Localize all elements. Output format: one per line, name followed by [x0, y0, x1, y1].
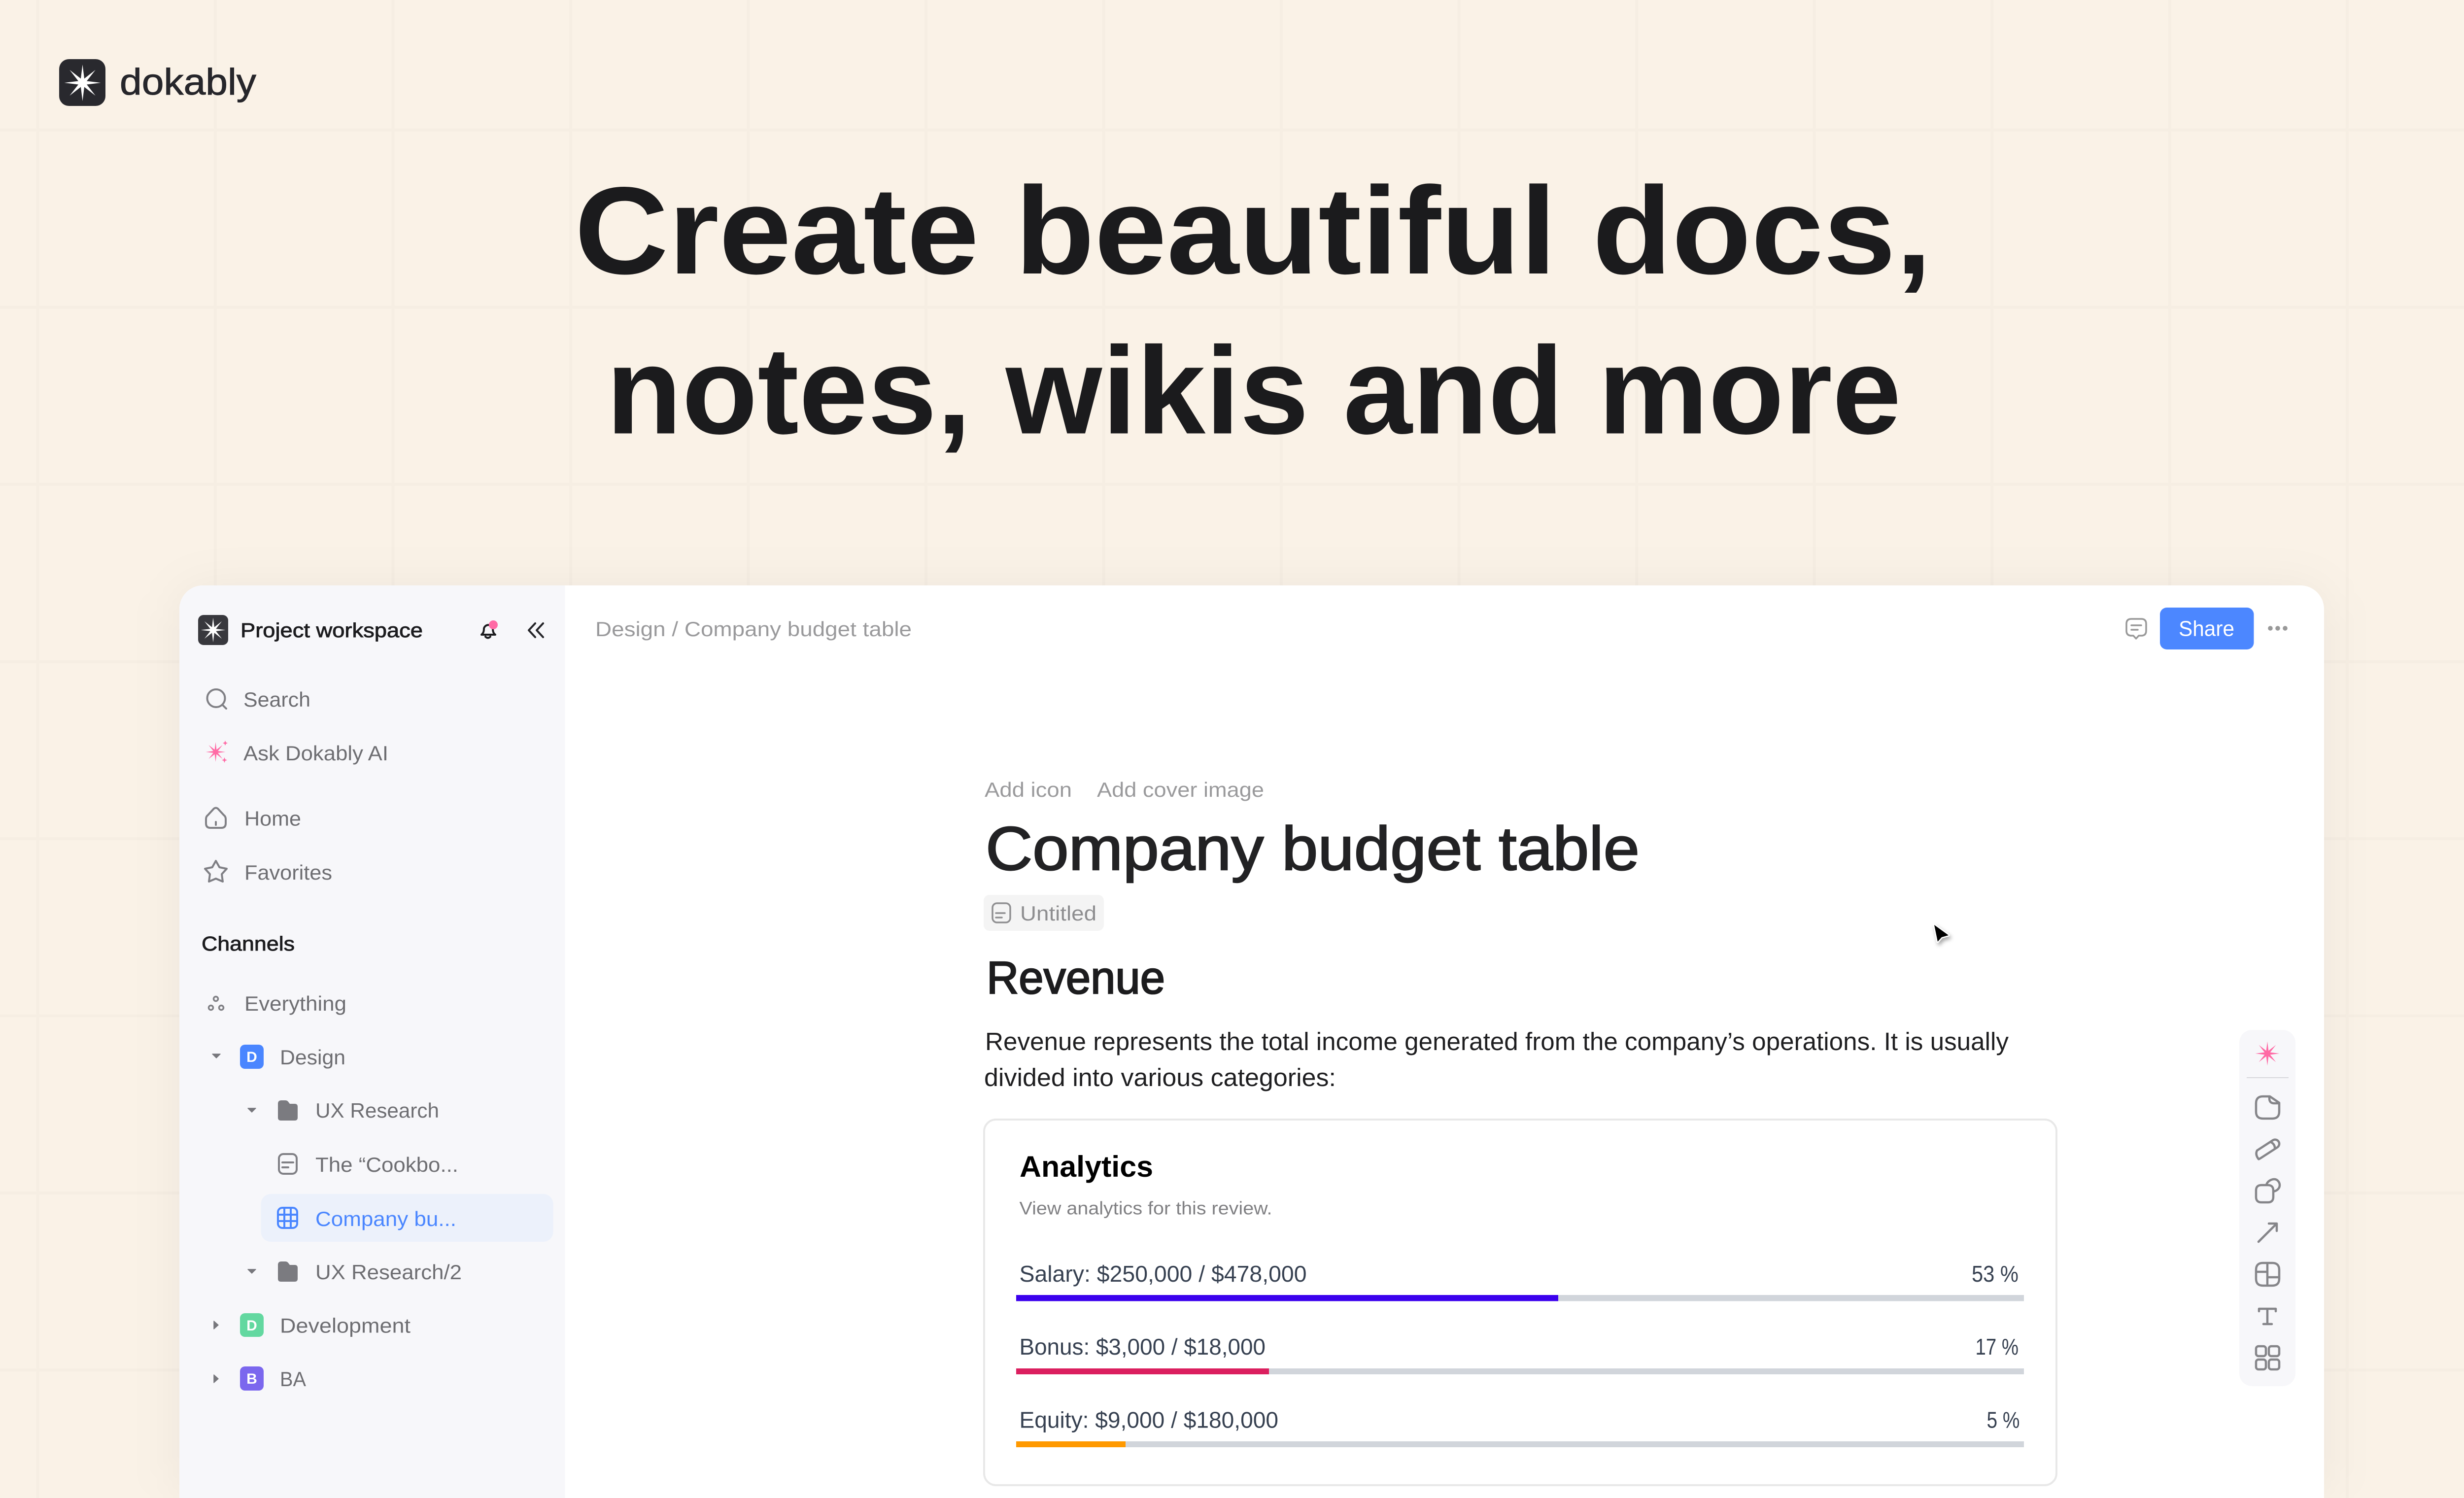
button: share: Share [2179, 617, 2234, 641]
workspace name: Project workspace [240, 619, 423, 642]
doc meta actions: Add icon [985, 778, 1072, 801]
selected doc: company budget: Company bu... [315, 1207, 456, 1230]
bar chart: bonus [1016, 1334, 2024, 1374]
analytics subtitle: View analytics for this review. [1019, 1198, 1272, 1218]
workspace header [198, 615, 543, 645]
doc meta actions: Add cover image [1097, 778, 1264, 801]
folder: UX research 2 [248, 1260, 462, 1284]
icon: text [2259, 1309, 2276, 1324]
nav: home: Home [244, 807, 301, 830]
icon: mouse cursor [1934, 925, 1949, 942]
icon: more menu [2268, 626, 2288, 631]
bar chart: salary [1016, 1261, 2024, 1301]
nav: search [207, 688, 310, 711]
nav: everything: Everything [244, 992, 346, 1015]
panel: app window [179, 585, 2324, 1498]
breadcrumb: Design / Company budget table [595, 617, 912, 641]
revenue paragraph [984, 1027, 2009, 1091]
icon: comment [2126, 619, 2146, 639]
title: headline: notes, wikis and more [606, 321, 1901, 460]
analytics heading: Analytics [1020, 1150, 1153, 1183]
card shadow [179, 589, 2324, 1498]
channel: development: Development [280, 1314, 411, 1337]
doc meta actions [985, 778, 1264, 801]
heading: revenue: Revenue [987, 952, 1165, 1003]
nav: search: Search [243, 688, 310, 711]
icon: sticky note [2256, 1096, 2279, 1119]
bar chart: salary: Salary: $250,000 / $478,000 [1019, 1261, 1307, 1287]
title: headline: Create beautiful docs, [575, 162, 1932, 300]
panel: analytics card [984, 1120, 2056, 1485]
channel: BA: B [246, 1371, 257, 1387]
doc title: Company budget table [986, 815, 1640, 883]
heading: channels: Channels [202, 932, 295, 955]
bar chart: equity: 5 % [1987, 1407, 2019, 1433]
button: share [2160, 608, 2254, 649]
bar chart: equity: Equity: $9,000 / $180,000 [1019, 1407, 1278, 1433]
channel: design: Design [280, 1046, 345, 1069]
bar chart: bonus: 17 % [1975, 1334, 2019, 1360]
panel: floating toolbar [2239, 1030, 2295, 1386]
chip: untitled: Untitled [1020, 902, 1096, 925]
bar chart: salary: 53 % [1972, 1261, 2019, 1287]
channel: BA [214, 1366, 306, 1391]
folder: UX research 2: UX Research/2 [315, 1260, 462, 1284]
icon: logo star badge [59, 59, 105, 106]
nav: favorites: Favorites [244, 861, 332, 884]
revenue paragraph: Revenue represents the total income generated from the company’s operations. It is usually [985, 1027, 2009, 1055]
top actions [2126, 608, 2288, 649]
channel: design: D [246, 1049, 257, 1065]
channel: development: D [246, 1318, 257, 1334]
icon: arrow [2259, 1224, 2277, 1242]
logo: dokably [59, 59, 257, 106]
title: headline [575, 162, 1932, 460]
selected doc: company budget [261, 1194, 553, 1242]
revenue paragraph: divided into various categories: [984, 1063, 1336, 1091]
panel: sidebar [179, 585, 565, 1498]
nav: favorites [205, 861, 332, 884]
chip: untitled [984, 895, 1104, 931]
bar chart: bonus: Bonus: $3,000 / $18,000 [1019, 1334, 1266, 1360]
icon: workspace logo [198, 615, 228, 645]
channel: BA: BA [280, 1367, 306, 1391]
nav: home [206, 807, 301, 830]
channel: design [212, 1045, 345, 1069]
icon: pencil [2254, 1138, 2281, 1159]
folder: UX research [248, 1099, 439, 1122]
nav: ask AI: Ask Dokably AI [243, 742, 388, 765]
wordmark: dokably [120, 61, 257, 102]
folder: UX research: UX Research [315, 1099, 439, 1122]
icon: notification bell [481, 620, 498, 638]
icon: AI star [2255, 1042, 2280, 1065]
bar chart: equity [1016, 1407, 2024, 1447]
doc: the cookbook: The “Cookbo... [315, 1153, 458, 1176]
icon: shapes [2256, 1179, 2280, 1202]
channel: development [214, 1313, 411, 1337]
icon: apps grid [2256, 1346, 2279, 1369]
icon: collapse sidebar [529, 623, 543, 637]
icon: table [2256, 1263, 2279, 1286]
